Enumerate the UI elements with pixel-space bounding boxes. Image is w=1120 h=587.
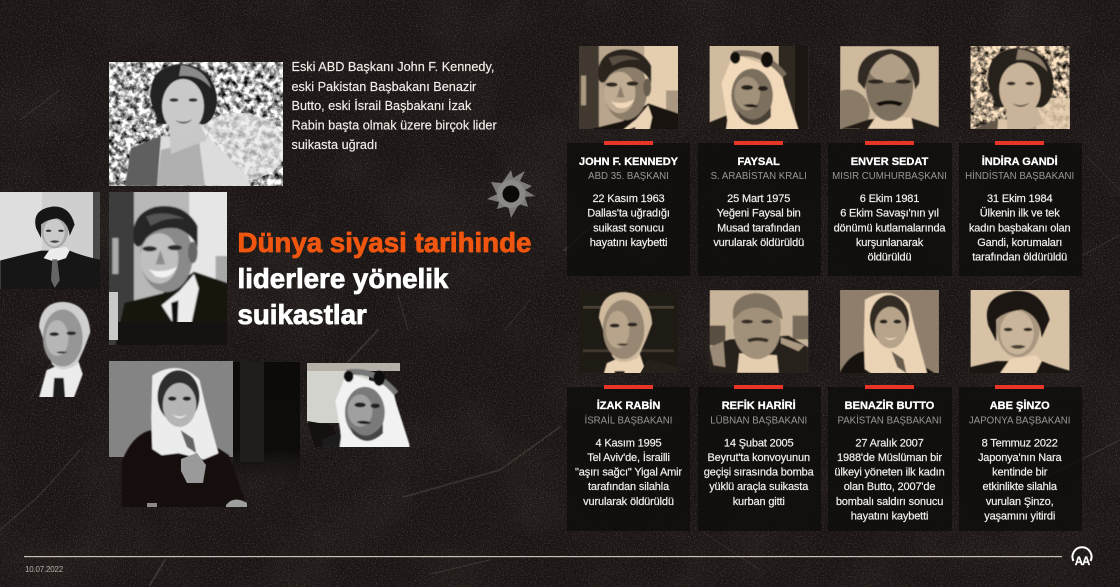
card: Refik Hariri: REFİK HARİRİ (722, 399, 796, 412)
intro text: Rabin başta olmak üzere birçok lider (292, 118, 497, 132)
card: Refik Hariri (698, 290, 821, 531)
card: Enver Sedat (826, 46, 952, 276)
card: Abe Sinzo (931, 290, 1119, 531)
icon: AA logo (1072, 547, 1092, 568)
card: Refik Hariri: LÜBNAN BAŞBAKANI (710, 416, 807, 427)
card: Refik Hariri: Beyrut'ta konvoyunun (707, 452, 810, 464)
card: Faysal: S. ARABİSTAN KRALI (711, 171, 807, 182)
card: Abe Sinzo: kentinde bir (992, 467, 1048, 479)
collage photo: Benazir Butto (109, 361, 247, 522)
footer rule (24, 556, 1062, 557)
card: Abe Sinzo: etkinlikte silahla (983, 481, 1058, 493)
card: Faysal: Musad tarafından (717, 222, 800, 234)
card: Abe Sinzo: yaşamını yitirdi (984, 510, 1055, 522)
card: John F. Kennedy: suikast sonucu (593, 222, 664, 234)
card: John F. Kennedy (567, 36, 698, 276)
card: Enver Sedat: kurşunlanarak (856, 237, 924, 249)
card: Indira Gandi: İNDİRA GANDİ (982, 155, 1058, 168)
card: Benazir Butto: 27 Aralık 2007 (855, 437, 924, 449)
collage photo: Faysal (307, 363, 410, 450)
card: Faysal: vurularak öldürüldü (713, 237, 804, 249)
card: Izak Rabin: İZAK RABİN (597, 399, 660, 412)
card: Izak Rabin: İSRAİL BAŞBAKANI (585, 416, 672, 427)
intro text: Eski ABD Başkanı John F. Kennedy, (292, 60, 494, 74)
card: John F. Kennedy: ABD 35. BAŞKANI (588, 171, 669, 182)
card: Enver Sedat: 6 Ekim Savaşı'nın yıl (840, 208, 939, 220)
title (238, 227, 531, 330)
card: Izak Rabin: tarafından silahla (588, 481, 670, 493)
card: Indira Gandi: kadın başbakanı olan (969, 222, 1071, 234)
card: Abe Sinzo: ABE ŞİNZO (990, 399, 1050, 412)
card: John F. Kennedy: hayatını kaybetti (590, 237, 667, 249)
collage photo: dark curtain (233, 362, 300, 487)
card: Benazir Butto: bombalı saldırı sonucu (836, 496, 943, 508)
card: Refik Hariri: yüklü araçla suikasta (709, 481, 809, 493)
collage photo: Izak Rabin (37, 302, 90, 404)
card: Enver Sedat: öldürüldü (868, 252, 911, 264)
card: Izak Rabin: "aşırı sağcı" Yigal Amir (575, 467, 682, 479)
card: Benazir Butto: 1988'de Müslüman bir (837, 452, 942, 464)
card: Faysal (698, 46, 821, 276)
card: Abe Sinzo: Japonya'nın Nara (978, 452, 1062, 464)
card: Izak Rabin: Tel Aviv'de, İsrailli (587, 451, 670, 464)
intro text: suikasta uğradı (292, 138, 378, 152)
card: John F. Kennedy: JOHN F. KENNEDY (579, 156, 679, 168)
card: Benazir Butto: ülkeyi yöneten ilk kadın (834, 467, 945, 479)
card: Izak Rabin: 4 Kasım 1995 (595, 437, 662, 449)
intro text: Butto, eski İsrail Başbakanı İzak (292, 99, 472, 113)
card: Indira Gandi: HİNDİSTAN BAŞBAKANI (965, 171, 1074, 182)
collage photo: Indira Gandi (109, 62, 287, 186)
date: 10.07.2022 (25, 565, 64, 574)
intro text: eski Pakistan Başbakanı Benazir (292, 80, 477, 94)
card: Enver Sedat: MISIR CUMHURBAŞKANI (832, 171, 947, 182)
icon: bullet hole (487, 170, 535, 218)
card: Benazir Butto: PAKİSTAN BAŞBAKANI (837, 416, 942, 427)
card: John F. Kennedy: 22 Kasım 1963 (592, 193, 665, 205)
icon: AA logo: AA (1075, 556, 1090, 568)
card: Refik Hariri: geçişi sırasında bomba (704, 467, 815, 479)
card: Refik Hariri: 14 Şubat 2005 (724, 437, 794, 449)
card: Indira Gandi: Gandi, korumaları (977, 237, 1062, 249)
card: Benazir Butto: hayatını kaybetti (851, 510, 928, 522)
card: Enver Sedat: ENVER SEDAT (851, 156, 928, 168)
card: Faysal: FAYSAL (738, 156, 780, 168)
title: liderlere yönelik (238, 263, 449, 294)
collage photo: Abe Sinzo (0, 192, 118, 293)
card: Indira Gandi (959, 46, 1092, 276)
card: Abe Sinzo: JAPONYA BAŞBAKANI (969, 416, 1070, 427)
card: Indira Gandi: 31 Ekim 1984 (987, 193, 1052, 205)
card: Enver Sedat: dönümü kutlamalarında (834, 222, 946, 234)
card: Faysal: 25 Mart 1975 (727, 193, 790, 205)
card: Enver Sedat: 6 Ekim 1981 (860, 193, 919, 205)
collage photo: John F. Kennedy (98, 190, 254, 370)
card: Indira Gandi: tarafından öldürüldü (972, 252, 1067, 264)
card: Benazir Butto: BENAZİR BUTTO (845, 399, 935, 412)
card: Refik Hariri: kurban gitti (733, 496, 785, 508)
title: Dünya siyasi tarihinde (238, 227, 531, 258)
card: John F. Kennedy: Dallas'ta uğradığı (587, 208, 670, 220)
card: Benazir Butto: olan Butto, 2007'de (844, 481, 935, 493)
card: Izak Rabin: vurularak öldürüldü (583, 496, 674, 508)
intro text (292, 60, 497, 152)
card: Faysal: Yeğeni Faysal bin (717, 208, 801, 220)
title: suikastlar (238, 299, 367, 330)
card: Benazir Butto (828, 290, 952, 531)
card: Izak Rabin (567, 290, 690, 531)
card: Abe Sinzo: vurulan Şinzo, (986, 496, 1054, 508)
card: Abe Sinzo: 8 Temmuz 2022 (982, 437, 1058, 449)
card: Indira Gandi: Ülkenin ilk ve tek (980, 208, 1060, 220)
